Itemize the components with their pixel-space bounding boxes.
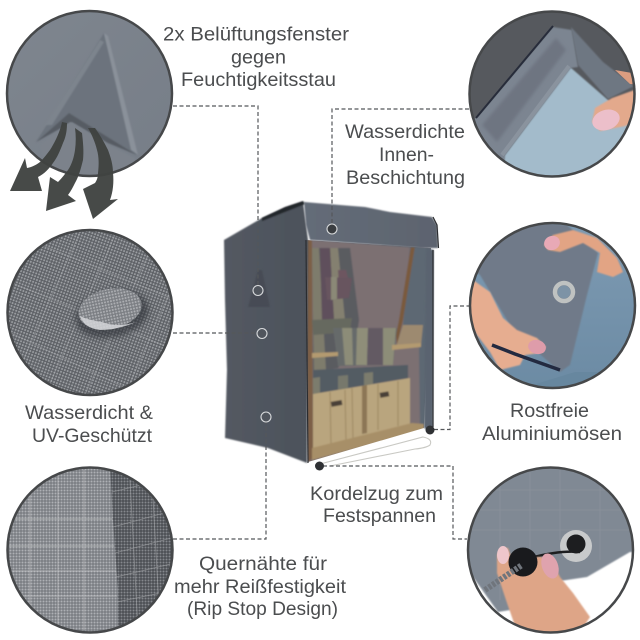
eyelet: [560, 530, 592, 562]
finger: [592, 90, 634, 132]
text: waterproof and UV protected: UV-Geschützt: [32, 425, 153, 447]
text: ventilation windows: [163, 24, 350, 91]
hand top: [544, 230, 623, 277]
text: rustproof eyelets: Aluminiumösen: [482, 423, 622, 445]
text: rip stop seams: [174, 553, 347, 620]
circle: waterproof fabric with droplet: [6, 228, 174, 396]
side vent: [248, 270, 270, 307]
text: waterproof and UV protected: Wasserdicht &: [25, 402, 153, 424]
cover left side: [224, 202, 308, 463]
text: waterproof inner coating: Innen-: [379, 144, 434, 166]
cover right side: [424, 248, 434, 430]
product: covered beach chair: [224, 201, 438, 470]
cover front flap: [304, 202, 438, 248]
fabric: [466, 222, 598, 372]
seat cushion: [313, 365, 408, 394]
wooden drawers: [313, 378, 410, 448]
water droplet: [72, 287, 152, 341]
text: waterproof inner coating: Beschichtung: [346, 167, 465, 189]
text: rip stop seams: Quernähte für: [199, 553, 328, 575]
text: drawstring: Kordelzug zum: [310, 483, 443, 505]
fold: [571, 27, 634, 99]
inner coating: [504, 68, 628, 176]
vent opening shadow: [36, 113, 137, 155]
hand: [497, 548, 590, 640]
dashed leader lines: [173, 106, 470, 539]
text: ventilation windows: Feuchtigkeitsstau: [181, 69, 336, 91]
vent flap: [38, 34, 130, 150]
text: rustproof eyelets: [482, 400, 622, 445]
cord through eyelet: [530, 552, 580, 558]
back pillow: [333, 328, 397, 366]
head pillow: [325, 277, 352, 300]
icon: airflow arrows: [10, 122, 118, 219]
circle: aluminium eyelet detail: [465, 220, 640, 395]
cord stopper: [508, 548, 538, 576]
circle: inner coating detail: [465, 5, 640, 180]
circle: drawstring detail: [465, 465, 640, 640]
drawstring loop: [320, 437, 431, 466]
wood post: [308, 240, 314, 462]
arm rests: [312, 352, 338, 358]
text: waterproof inner coating: [345, 121, 465, 189]
text: drawstring: Festspannen: [323, 505, 436, 527]
text: drawstring: [310, 483, 443, 527]
hand left: [471, 280, 546, 370]
fabric: [465, 465, 640, 612]
marker dots: [253, 224, 434, 470]
circle: rip stop fabric: [0, 465, 180, 635]
text: waterproof and UV protected: [25, 402, 153, 447]
circle: ventilation window detail: [6, 10, 174, 178]
text: rustproof eyelets: Rostfreie: [510, 400, 589, 422]
cover interior and chair: [307, 240, 431, 462]
backrest stripes: [313, 248, 359, 372]
eyelet: [555, 283, 573, 301]
text: rip stop seams: (Rip Stop Design): [187, 598, 338, 620]
text: waterproof inner coating: Wasserdichte: [345, 121, 465, 143]
text: ventilation windows: 2x Belüftungsfenster: [163, 24, 350, 46]
text: ventilation windows: gegen: [231, 46, 286, 68]
braided cord: [485, 565, 522, 590]
floor: [312, 423, 424, 460]
text: rip stop seams: mehr Reißfestigkeit: [174, 576, 347, 598]
